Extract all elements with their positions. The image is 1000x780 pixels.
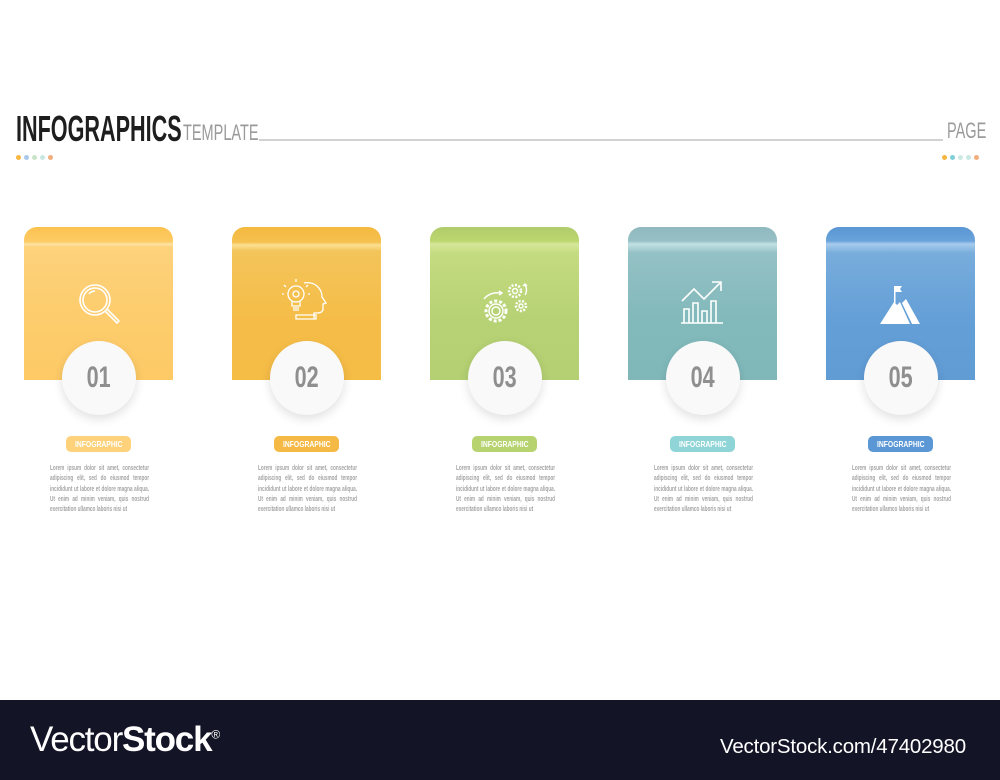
icon: gears — [484, 283, 528, 322]
panel: step 01 — [24, 227, 173, 513]
panel: step 02: Lorem ipsum dolor sit amet, consectetur adipiscing elit, sed do eiusmod tempor incididunt ut labore et dolore magna aliqua. Ut enim ad minim veniam, quis nostrud exercitation ullamco laboris nisi ut — [258, 463, 357, 513]
panel: step 04 — [628, 227, 777, 513]
icon: lightbulb head — [282, 279, 327, 320]
panel: step 02: INFOGRAPHIC — [283, 439, 330, 449]
panel: step 04: Lorem ipsum dolor sit amet, consectetur adipiscing elit, sed do eiusmod tempor incididunt ut labore et dolore magna aliqua. Ut enim ad minim veniam, quis nostrud exercitation ullamco laboris nisi ut — [654, 463, 753, 513]
page label: PAGE — [947, 118, 986, 143]
panel: step 05: INFOGRAPHIC — [877, 439, 924, 449]
panel: step 05: Lorem ipsum dolor sit amet, consectetur adipiscing elit, sed do eiusmod tempor incididunt ut labore et dolore magna aliqua. Ut enim ad minim veniam, quis nostrud exercitation ullamco laboris nisi ut — [852, 463, 951, 513]
panel: step 03: INFOGRAPHIC — [481, 439, 528, 449]
icon: growth chart — [681, 281, 723, 324]
panel: step 03: Lorem ipsum dolor sit amet, consectetur adipiscing elit, sed do eiusmod tempor incididunt ut labore et dolore magna aliqua. Ut enim ad minim veniam, quis nostrud exercitation ullamco laboris nisi ut — [456, 463, 555, 513]
dots left — [16, 155, 53, 160]
panel: step 01: INFOGRAPHIC — [75, 439, 122, 449]
footer url: VectorStock.com/47402980 — [720, 735, 966, 758]
panel: step 04: 04 — [691, 361, 715, 394]
title: INFOGRAPHICS — [16, 108, 182, 149]
panel: step 01: 01 — [87, 361, 111, 394]
panel: step 01: Lorem ipsum dolor sit amet, consectetur adipiscing elit, sed do eiusmod tempor incididunt ut labore et dolore magna aliqua. Ut enim ad minim veniam, quis nostrud exercitation ullamco laboris nisi ut — [50, 463, 149, 513]
title — [16, 108, 259, 149]
title: TEMPLATE — [183, 120, 259, 145]
panel: step 05 — [826, 227, 975, 513]
dots right — [942, 155, 979, 160]
panel: step 03 — [430, 227, 579, 513]
panel: step 02: 02 — [295, 361, 319, 394]
panel: step 05: 05 — [889, 361, 913, 394]
icon: mountain flag — [880, 286, 920, 324]
panel: step 03: 03 — [493, 361, 517, 394]
footer — [0, 700, 1000, 780]
panel: step 04: INFOGRAPHIC — [679, 439, 726, 449]
icon: magnifier — [79, 284, 120, 324]
panel: step 02 — [232, 227, 381, 513]
footer logo: VectorStock® — [30, 720, 219, 759]
